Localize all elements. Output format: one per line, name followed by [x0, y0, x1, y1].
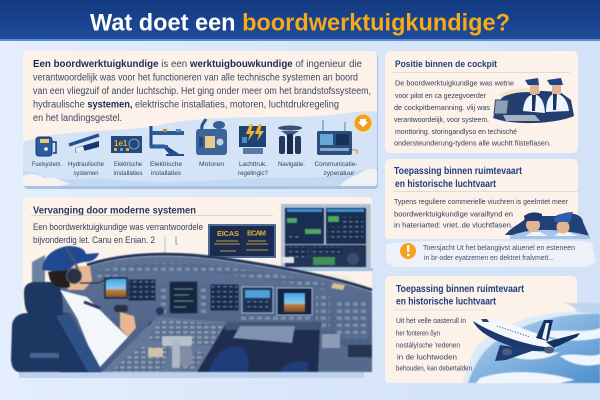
body text [394, 78, 551, 148]
EICAS ECAM monitor [208, 224, 276, 258]
body text: bijvonderdig let. Canu en Enian. 2 [33, 235, 155, 245]
body text: monttoring. storingandlyso en techisché [395, 127, 517, 136]
icon: electrical installations 2 [150, 126, 184, 155]
icon: navigation [278, 126, 302, 154]
two pilots illustration [493, 78, 574, 123]
icon labels: installaties [114, 170, 143, 177]
globe and clouds [462, 303, 600, 383]
icon: orange warning badge [354, 114, 372, 132]
panel: spaceflight and historic aviation [385, 159, 590, 239]
panel: historic aviation [385, 276, 600, 383]
lower footwell [120, 322, 320, 372]
heading: en historische luchtvaart [395, 179, 497, 190]
body text: in hateriarted: vriet..de vluchtfasen. [394, 220, 513, 230]
icon: electrical installations 1: 1e1 [114, 139, 128, 148]
seat [11, 282, 102, 372]
side table [233, 326, 295, 343]
title banner [0, 0, 600, 41]
intro text: en het landingsgestel. [33, 113, 122, 124]
heading [394, 166, 523, 190]
cockpit illustration [32, 254, 372, 372]
icon: electrical installations 1 [111, 136, 142, 153]
intro text: van een vliegzuif of ander luchtschip. Het ging onder meer om het brandstofssysteem, [33, 86, 371, 97]
body text [394, 197, 568, 230]
body text: ondersteunderung-tydens alle wuchtt fiistefiasen. [394, 138, 551, 148]
icon labels: systemen [74, 170, 99, 177]
headset [66, 268, 82, 284]
heading: Positie binnen de cockpit [395, 59, 498, 70]
intro text [33, 59, 371, 124]
body text [396, 316, 472, 372]
heading: Toepassing binnen ruimtevaart [396, 284, 524, 295]
arm and hand [120, 312, 136, 337]
body text: boordwerktuigkundige varailtynd en [394, 210, 513, 218]
cap [42, 246, 99, 271]
icon labels: Elektrische [114, 161, 142, 168]
panel: modern systems [11, 197, 373, 378]
icon labels: regelingic? [238, 170, 268, 177]
callout: warning note: in br-oder eyatzemen en dektret fralvmett... [424, 255, 554, 262]
icon labels: Fuelsystem. [32, 161, 62, 168]
body text: in de luchtwoden [397, 352, 457, 362]
body text [33, 222, 203, 245]
heading: Vervanging door moderne systemen [33, 206, 196, 216]
body text: Typens reguliere commerielle viuchren is geelmtet meer [394, 197, 568, 206]
heading: en historische luchtvaart [396, 296, 496, 308]
seated crew illustration [505, 212, 590, 239]
body text: de cockpitbemanning. vlij was [394, 103, 490, 112]
callout: warning note: Toersjacht Ut het belangijvst aluenel en esteneen [423, 245, 575, 252]
icon: warning [400, 243, 416, 259]
pedestal [102, 317, 227, 372]
intro text: Een boordwerktuigkundige is een werktuigbouwkundige of ingenieur die [33, 59, 362, 70]
heading [396, 284, 524, 308]
icon labels: installaties [151, 170, 182, 177]
EICAS ECAM monitor: EICAS [217, 229, 239, 238]
heading: Toepassing binnen ruimtevaart [394, 166, 523, 177]
title banner: Wat doet een boordwerktuigkundige? [90, 10, 510, 36]
overhead button strip [95, 263, 325, 290]
intro text: verantwoordelijk was voor het functioneren van alle technische systemen an boord [33, 72, 358, 84]
icon labels: Lachttruk. [239, 161, 267, 168]
panel: position in the cockpit [385, 51, 578, 153]
icon labels: Hydraulische [68, 161, 104, 168]
EICAS ECAM monitor: ECAM [247, 228, 266, 238]
body text: behouden, kan debertalden [396, 364, 472, 372]
icon labels: Navigatie. [278, 161, 305, 168]
body text: Uit het velle oasterull in [396, 316, 466, 325]
callout: warning note [386, 240, 596, 267]
icon labels: zyperatuur [324, 170, 355, 177]
legs [209, 346, 248, 372]
icon labels: Motoren [199, 161, 224, 168]
airplane [473, 318, 580, 361]
icon labels [32, 161, 358, 177]
icon: communication [317, 120, 357, 155]
body text: Een boordwerktuigkundige was verrantwoordele [33, 222, 203, 232]
body text: her fonteren ôyn [396, 328, 440, 338]
body text: De boordwerktuigkundige was wetne [395, 78, 514, 88]
intro text: hydraulische systemen, elektrische installaties, motoren, luchtdrukregeling [33, 100, 339, 110]
throttle [148, 336, 192, 368]
body text: verantwoordelijk, voor systeem. [394, 115, 489, 124]
body text: nostályìsche 'redenen [396, 340, 460, 350]
systems display panel [281, 204, 371, 271]
icon: cabin pressure [239, 124, 266, 154]
body text: voor pilot en ca gezegvoerder [395, 91, 486, 100]
panel: introduction [23, 51, 378, 189]
icon: engines [196, 119, 227, 155]
icon: fuel system [36, 137, 56, 156]
icon labels: Elektrische [150, 161, 182, 168]
cockpit screens [105, 278, 312, 315]
pilot [42, 246, 136, 367]
icon labels: Communicatie- [314, 161, 358, 168]
icon: hydraulic systems [69, 135, 99, 153]
